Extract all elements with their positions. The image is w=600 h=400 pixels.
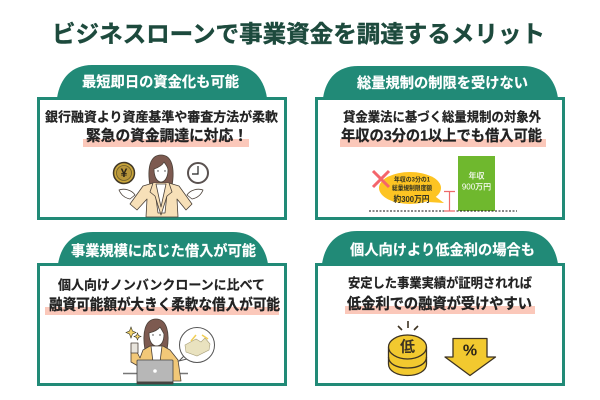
text: screening: 銀行融資より資産基準や審査方法が柔軟 bbox=[45, 110, 278, 124]
icon: low rate coins bbox=[388, 321, 426, 376]
panel: business scale bbox=[38, 232, 286, 384]
tab heading: business scale: 事業規模に応じた借入が可能 bbox=[71, 242, 256, 260]
bracket: one third height bbox=[444, 192, 455, 211]
tab heading: low interest: 個人向けより低金利の場合も bbox=[350, 241, 535, 259]
text: urgent funding: 緊急の資金調達に対応！ bbox=[86, 126, 248, 144]
panel box bbox=[38, 98, 286, 218]
icon: cross bbox=[373, 171, 389, 187]
icon: sparkles bbox=[126, 327, 141, 340]
title: ビジネスローンで事業資金を調達するメリット bbox=[52, 21, 545, 47]
highlight bbox=[83, 139, 249, 147]
text: comparison: 個人向けノンバンクローンに比べて bbox=[58, 278, 265, 292]
text: easier loans: 低金利での融資が受けやすい bbox=[347, 294, 532, 312]
tab heading: lending cap: 総量規制の制限を受けない bbox=[357, 74, 528, 92]
icon: low rate coins: 低 bbox=[400, 338, 415, 356]
panel: quick funding bbox=[38, 65, 286, 218]
panel: low interest bbox=[316, 231, 564, 384]
illustration: woman at laptop bbox=[123, 319, 188, 384]
text: larger loans: 融資可能額が大きく柔軟な借入が可能 bbox=[49, 296, 280, 314]
tab heading: low interest bbox=[322, 231, 558, 264]
bar: annual income bbox=[458, 156, 495, 211]
icon: down arrow with percent: % bbox=[463, 342, 477, 360]
panel: lending cap bbox=[316, 66, 564, 218]
text: one third: 年収の3分の1以上でも借入可能 bbox=[341, 126, 542, 144]
chart: income comparison bbox=[369, 156, 517, 211]
callout: limit: 総量規制限度額 bbox=[392, 183, 432, 192]
tab heading: business scale bbox=[58, 232, 268, 264]
callout: limit bbox=[379, 172, 444, 204]
icon: clock bbox=[188, 163, 208, 183]
highlight bbox=[345, 306, 535, 314]
panel box bbox=[316, 264, 564, 384]
tab heading: quick funding: 最短即日の資金化も可能 bbox=[82, 73, 239, 91]
icon: yen coin bbox=[114, 162, 134, 184]
tab heading: quick funding bbox=[57, 65, 267, 98]
callout: money bbox=[179, 328, 214, 362]
bar: annual income: 年収 bbox=[468, 170, 484, 180]
panel box bbox=[38, 264, 286, 384]
icon: yen coin: ¥ bbox=[121, 166, 128, 180]
illustration: woman with open hands bbox=[119, 155, 203, 217]
bar: annual income: 900万円 bbox=[462, 182, 491, 192]
highlight bbox=[45, 307, 279, 315]
tab heading: lending cap bbox=[323, 66, 558, 98]
callout: limit: 年収の3分の1 bbox=[394, 174, 430, 184]
baseline bbox=[369, 210, 517, 212]
text: track record: 安定した事業実績が証明されれば bbox=[348, 276, 532, 290]
text: exempt: 貸金業法に基づく総量規制の対象外 bbox=[343, 110, 541, 124]
icon: down arrow with percent bbox=[445, 338, 496, 376]
highlight bbox=[340, 139, 546, 147]
callout: limit: 約300万円 bbox=[394, 194, 430, 204]
panel box bbox=[316, 98, 564, 218]
